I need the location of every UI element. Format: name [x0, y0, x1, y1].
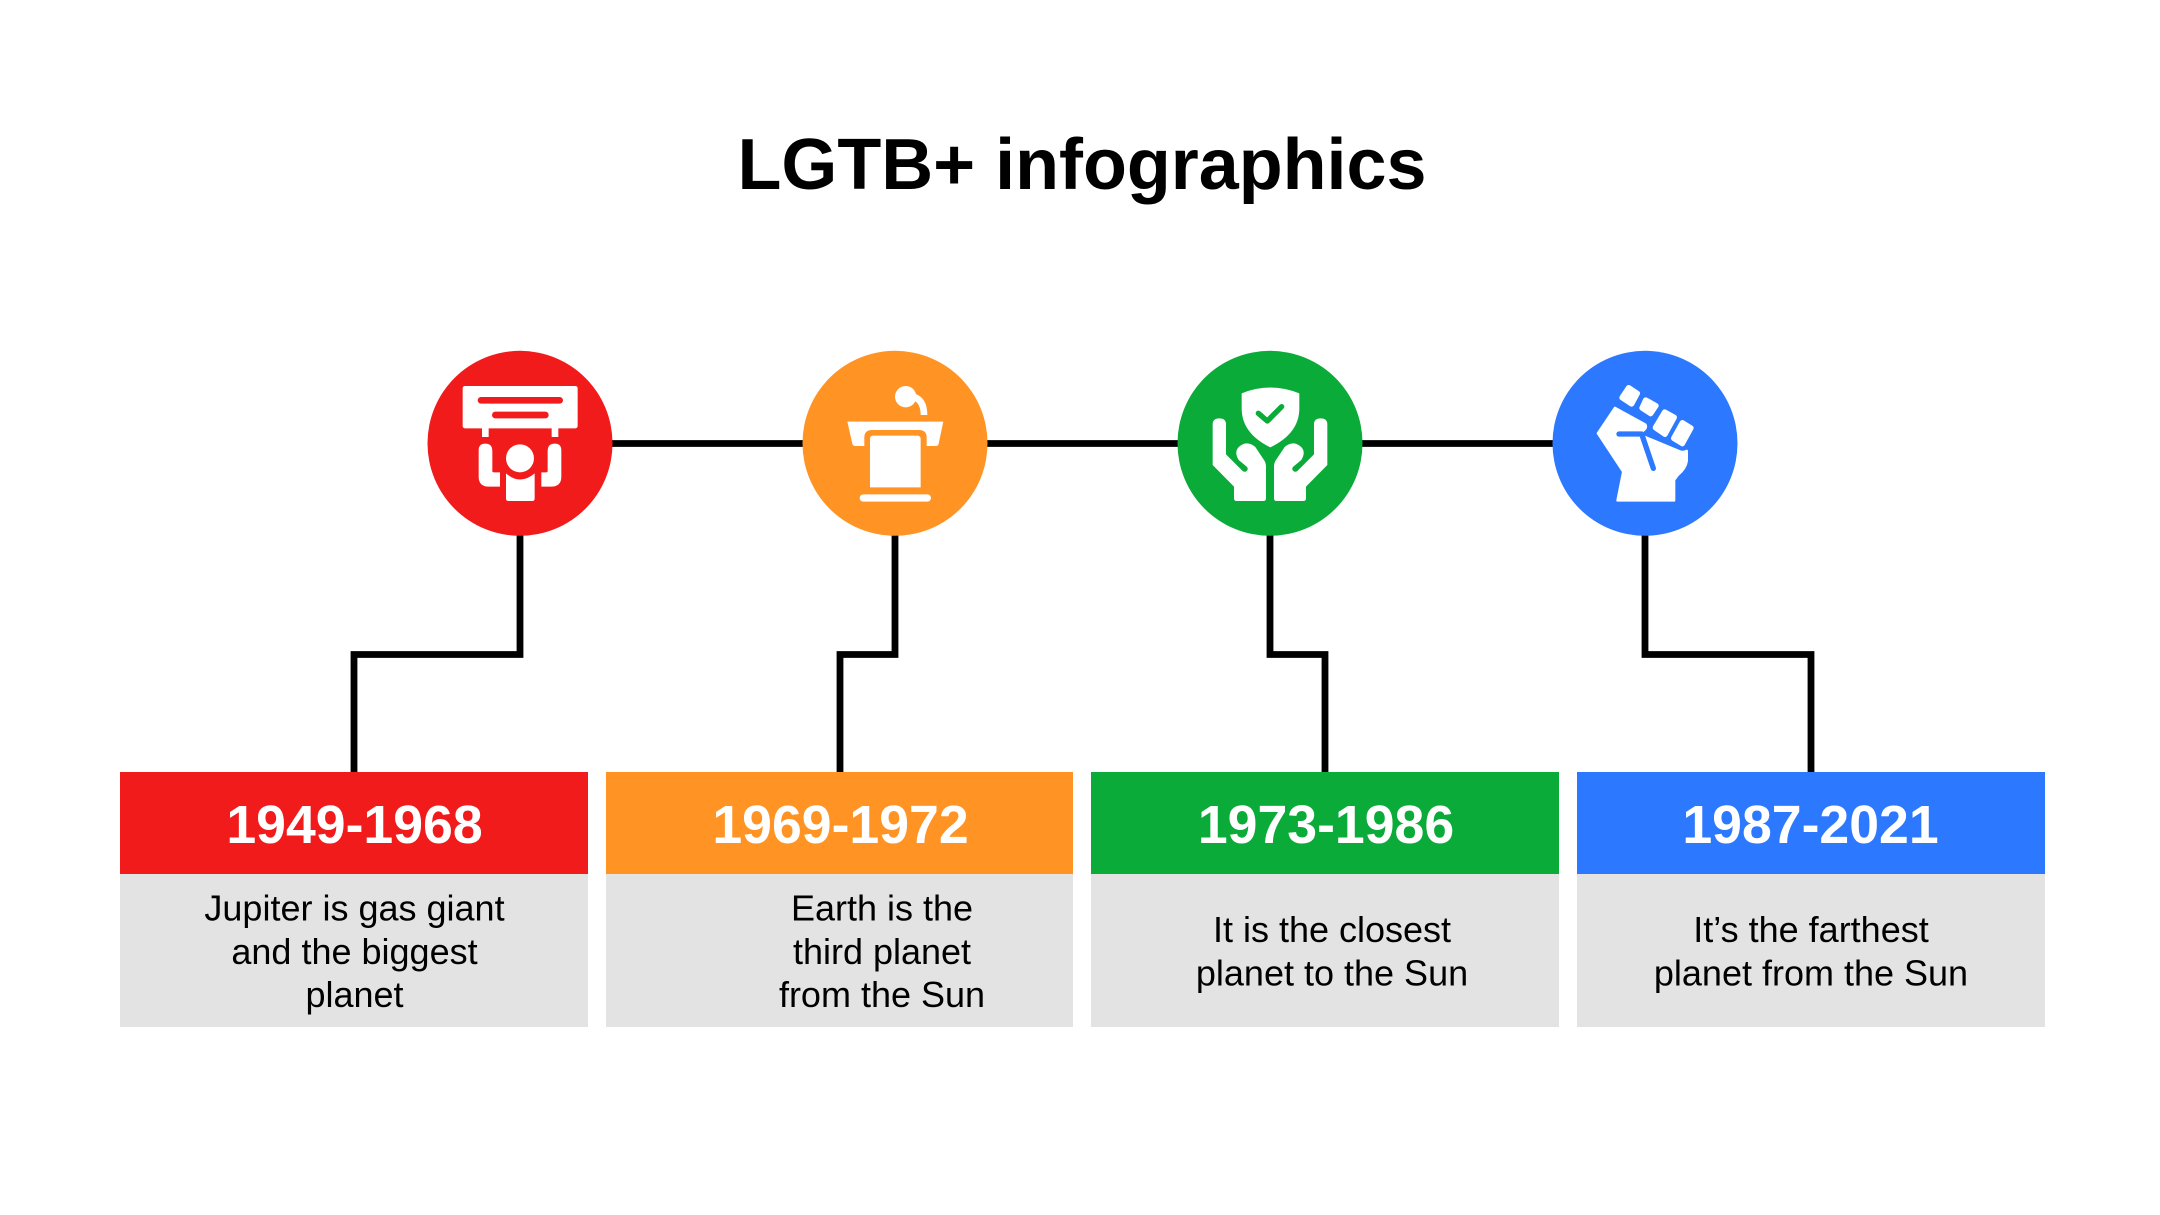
panel: 1973-1986: It is the closest	[1213, 909, 1451, 950]
panel: 1973-1986: planet to the Sun	[1196, 952, 1468, 994]
icon: hands holding shield in green circle	[1178, 351, 1362, 536]
panel: 1969-1972: 1969-1972	[712, 795, 969, 855]
icon: protest banner in red circle	[428, 351, 612, 536]
panel: 1949-1968	[120, 772, 588, 1027]
icon: raised fist in blue circle	[1552, 351, 1738, 536]
icon: podium in orange circle	[802, 351, 988, 536]
panel: 1973-1986	[1091, 772, 1559, 1027]
panel: 1973-1986: 1973-1986	[1198, 795, 1454, 855]
panel: 1949-1968: and the biggest	[231, 931, 478, 972]
panel: 1987-2021: 1987-2021	[1682, 795, 1939, 855]
panel: 1969-1972: from the Sun	[779, 974, 985, 1015]
panel: 1987-2021	[1577, 772, 2045, 1027]
panel: 1987-2021: planet from the Sun	[1654, 952, 1968, 994]
panel: 1949-1968: 1949-1968	[226, 795, 483, 855]
panel: 1969-1972: Earth is the	[791, 888, 973, 928]
panel: 1987-2021: It’s the farthest	[1693, 909, 1929, 950]
panel: 1949-1968: planet	[305, 974, 404, 1015]
panel: 1949-1968: Jupiter is gas giant	[204, 888, 505, 928]
panel: 1969-1972	[606, 772, 1073, 1027]
panel: 1969-1972: third planet	[793, 931, 971, 972]
title: LGTB+ infographics	[738, 125, 1426, 205]
timeline connector lines	[354, 444, 1811, 772]
